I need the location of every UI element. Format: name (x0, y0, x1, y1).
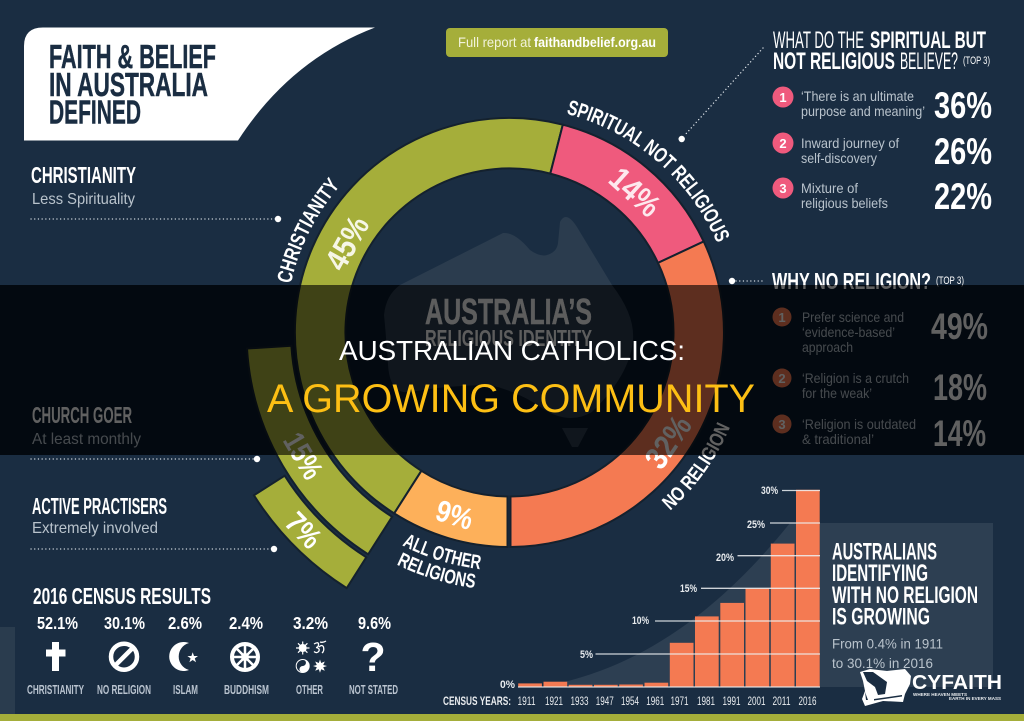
callout: what the spiritual but not religious believe: 36% (934, 85, 992, 126)
callout: what the spiritual but not religious believe: 3 (779, 181, 787, 196)
callout: why no religion: WHY NO RELIGION? (772, 268, 931, 294)
callout: what the spiritual but not religious believe: religious beliefs (801, 195, 888, 211)
x axis labels: 1971 (670, 694, 689, 708)
banner: headline overlay: A GROWING COMMUNITY (267, 377, 755, 421)
panel: title card: FAITH & BELIEF (49, 38, 216, 75)
callout: what the spiritual but not religious believe: Mixture of (801, 180, 858, 196)
donut labels: 9% (432, 494, 477, 537)
callout: what the spiritual but not religious believe: BELIEVE? (900, 48, 958, 75)
donut labels: ALL OTHER (402, 534, 481, 570)
footer bar (0, 714, 1024, 721)
x axis labels: 1947 (596, 694, 614, 708)
callout: what the spiritual but not religious believe: purpose and meaning’ (801, 103, 925, 119)
donut labels: NO RELIGION (662, 422, 730, 510)
x axis labels: 2001 (748, 694, 766, 708)
callout: what the spiritual but not religious believe: 1 (779, 90, 787, 105)
callout: why no religion: & traditional’ (802, 431, 874, 447)
axis labels: 10% (632, 615, 649, 627)
banner: headline overlay (0, 285, 1024, 455)
donut labels (276, 100, 730, 588)
x axis labels: 1991 (722, 694, 741, 708)
donut labels: 32% (637, 409, 699, 475)
donut labels: SPIRITUAL NOT RELIGIOUS (568, 100, 730, 242)
callout: why no religion: (TOP 3) (936, 275, 964, 287)
donut labels: 15% (276, 427, 329, 485)
text block: australians identifying with no religion is growing: From 0.4% in 1911 (832, 636, 943, 652)
callout: why no religion: approach (802, 339, 853, 355)
button: full report link (446, 28, 668, 57)
chart: no religion by census year (443, 485, 820, 708)
census: not stated: ? (360, 634, 386, 680)
callout: why no religion: ‘Religion is a crutch (802, 370, 909, 386)
text block: australians identifying with no religion is growing: to 30.1% in 2016 (832, 655, 933, 671)
button: full report link: faithandbelief.org.au (534, 34, 656, 50)
x axis labels: 1981 (697, 694, 715, 708)
segment: no religion 32% (510, 242, 724, 547)
x axis labels: 2011 (772, 694, 791, 708)
definition: active practisers (31, 493, 277, 552)
census: no religion: 30.1% (104, 613, 145, 633)
axis labels: 15% (680, 583, 697, 595)
x axis labels (443, 694, 817, 708)
census: other: 3.2% (293, 613, 328, 633)
callout: what the spiritual but not religious believe: (TOP 3) (963, 55, 990, 67)
x axis labels: 1911 (518, 694, 536, 708)
callout: what the spiritual but not religious believe: 26% (934, 131, 992, 172)
callout: why no religion: 2 (778, 371, 786, 386)
axis labels: 25% (747, 519, 765, 531)
donut labels: 7% (278, 506, 328, 555)
callout: why no religion: ‘evidence-based’ (802, 324, 895, 340)
x axis labels: CENSUS YEARS: (443, 694, 511, 708)
chart: religious identity donut (247, 118, 724, 588)
x axis labels: 1933 (570, 694, 589, 708)
text block: australians identifying with no religion is growing: AUSTRALIANS (832, 538, 937, 566)
census: other (293, 613, 328, 697)
text block: australians identifying with no religion is growing: IS GROWING (832, 603, 930, 630)
census: islam: ISLAM (173, 682, 198, 697)
logo: cyfaith: CYFAITH (912, 672, 1002, 694)
callout: what the spiritual but not religious believe: 22% (934, 176, 992, 217)
button: full report link: Full report at (458, 34, 531, 50)
segment: spiritual not religious 14% (550, 125, 704, 263)
gridlines (518, 490, 820, 687)
census: christianity: 52.1% (37, 613, 78, 633)
axis labels (500, 485, 778, 691)
callout: what the spiritual but not religious believe (678, 27, 992, 217)
census: buddhism: 2.4% (229, 613, 263, 633)
callout: why no religion: 14% (933, 413, 986, 454)
census: other: OTHER (296, 682, 323, 697)
axis labels: 20% (716, 552, 734, 564)
segment: church goer 15% (247, 346, 392, 554)
donut labels: 14% (602, 160, 668, 224)
axis labels: 30% (761, 485, 778, 497)
definition: church goer (31, 402, 260, 462)
callout: what the spiritual but not religious believe: NOT RELIGIOUS (773, 48, 895, 75)
definition: christianity: CHRISTIANITY (31, 162, 136, 188)
panel: title card: IN AUSTRALIA (49, 66, 208, 103)
callout: why no religion: 3 (778, 417, 786, 432)
x axis labels: 1954 (621, 694, 639, 708)
panel: 2016 census results (27, 583, 398, 697)
panel: title card (24, 28, 375, 140)
panel: 2016 census results: 2016 CENSUS RESULTS (33, 583, 211, 609)
text block: australians identifying with no religion is growing (832, 538, 978, 671)
segment: all other religions 9% (394, 471, 508, 547)
census: islam: 2.6% (168, 613, 202, 633)
callout: why no religion: 18% (933, 367, 987, 408)
logo: cyfaith: EARTH IN EVERY MASS (949, 696, 1001, 701)
callout: why no religion (729, 268, 988, 454)
map: australia silhouette with heading: AUSTRALIA’S (425, 291, 592, 332)
x axis labels: 2016 (798, 694, 817, 708)
census: not stated: 9.6% (358, 613, 391, 633)
donut labels: CHRISTIANITY (278, 176, 338, 282)
census: buddhism: BUDDHISM (224, 682, 269, 697)
donut labels: 45% (318, 210, 376, 276)
panel: no religion growth backdrop (540, 523, 993, 687)
banner: headline overlay: AUSTRALIAN CATHOLICS: (339, 335, 685, 366)
census: islam (168, 613, 202, 697)
callout: what the spiritual but not religious believe: Inward journey of (801, 135, 899, 151)
logo: cyfaith (860, 669, 1002, 706)
definition: church goer: At least monthly (32, 431, 141, 448)
x axis labels: 1921 (545, 694, 563, 708)
callout: what the spiritual but not religious believe: 2 (779, 136, 787, 151)
census: buddhism (224, 613, 269, 697)
callout: why no religion: 49% (931, 306, 988, 347)
map: australia silhouette with heading (384, 217, 633, 447)
census: not stated (349, 613, 398, 697)
callout: why no religion: Prefer science and (802, 309, 904, 325)
axis labels: 0% (500, 679, 515, 691)
definition: christianity (31, 162, 281, 222)
definition: active practisers: ACTIVE PRACTISERS (32, 493, 167, 519)
map: australia silhouette with heading: RELIGIOUS IDENTITY (425, 325, 592, 351)
callout: why no religion: 1 (778, 310, 786, 325)
axis labels: 5% (580, 649, 593, 661)
census: no religion: NO RELIGION (97, 682, 151, 697)
definition: church goer: CHURCH GOER (32, 402, 132, 428)
callout: what the spiritual but not religious believe: WHAT DO THE (773, 27, 864, 54)
census: christianity: CHRISTIANITY (27, 682, 84, 697)
definition: active practisers: Extremely involved (32, 520, 158, 537)
callout: why no religion: for the weak’ (802, 385, 872, 401)
donut labels: RELIGIONS (397, 552, 476, 588)
callout: what the spiritual but not religious believe: ‘There is an ultimate (801, 88, 914, 104)
census: christianity (27, 613, 84, 697)
callout: why no religion: ‘Religion is outdated (802, 416, 916, 432)
segment: christianity 45% (295, 118, 563, 513)
census: no religion (97, 613, 151, 697)
callout: what the spiritual but not religious believe: self-discovery (801, 150, 877, 166)
logo: cyfaith: WHERE HEAVEN MEETS (913, 692, 967, 697)
segment: active practisers 7% (254, 476, 366, 588)
bars (518, 490, 820, 687)
panel: title card: DEFINED (49, 94, 141, 130)
census: not stated: NOT STATED (349, 682, 398, 697)
text block: australians identifying with no religion is growing: IDENTIFYING (832, 560, 928, 587)
definition: christianity: Less Spirituality (32, 191, 135, 208)
x axis labels: 1961 (646, 694, 665, 708)
